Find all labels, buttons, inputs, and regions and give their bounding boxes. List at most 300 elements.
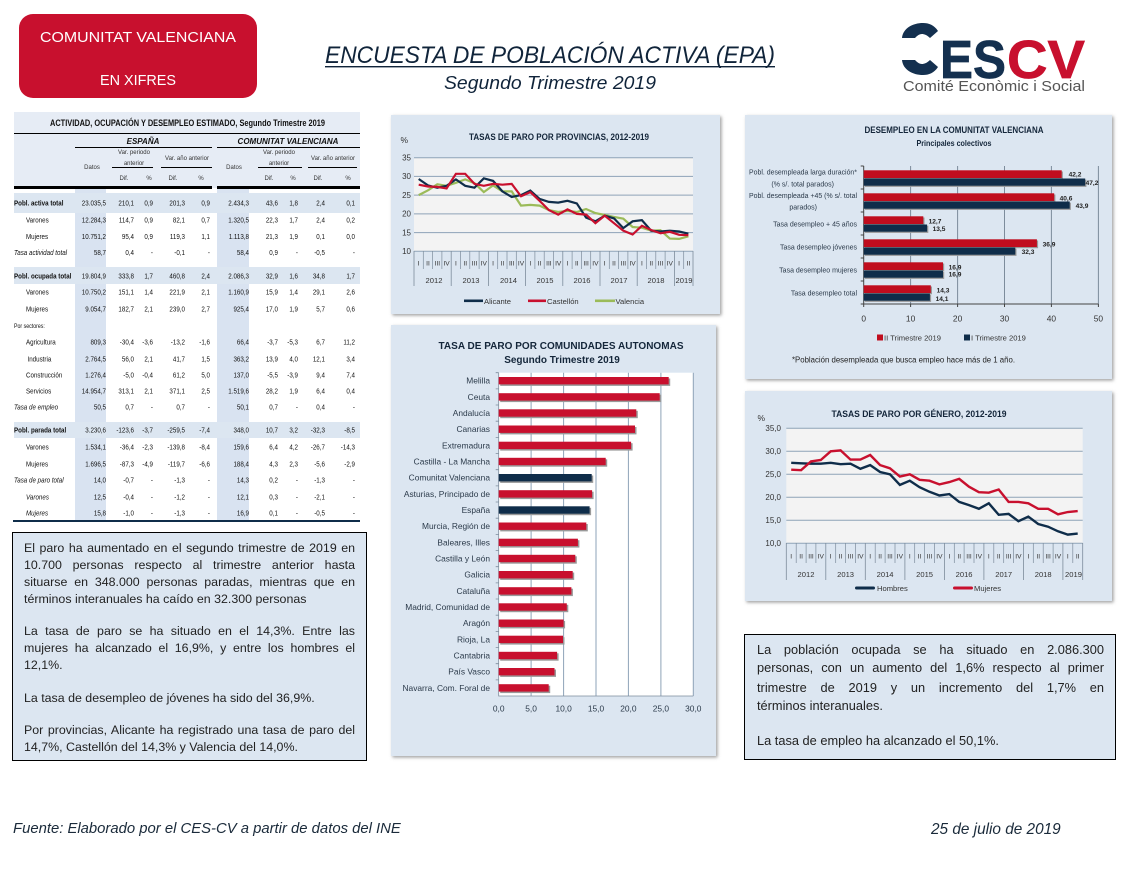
table rows: -139,8 (167, 444, 185, 452)
line chart: provincias: 20 (402, 210, 412, 219)
bar chart: comunidades: 25,0 (653, 704, 669, 714)
line chart: género: IV (1055, 553, 1062, 560)
bar chart: comunidades: Canarias (456, 424, 490, 434)
bar chart: colectivos: 30 (1000, 314, 1009, 324)
table rows: 809,3 (90, 339, 106, 347)
table rows: Pobl. parada total (14, 427, 66, 435)
panel: tasas de paro por género (745, 391, 1112, 601)
line chart: género: 20,0 (765, 493, 782, 502)
table: actividad, ocupación y desempleo (13, 112, 360, 522)
logo: CES CV: Comité Econòmic i Social (903, 79, 1085, 95)
table rows: 0,4 (125, 250, 134, 257)
table rows: Varones (26, 289, 49, 297)
line chart: provincias: 2016 (574, 276, 590, 285)
table rows: -0,4 (123, 494, 134, 502)
line chart: provincias: III (435, 260, 440, 267)
table rows: 41,7 (173, 356, 185, 364)
line chart: género: III (808, 553, 814, 560)
table rows: 1,4 (289, 289, 298, 297)
table rows: 29,1 (313, 289, 325, 297)
table header: anterior (269, 161, 289, 167)
table rows: - (151, 404, 153, 412)
line chart: género: I (909, 553, 911, 560)
line chart: provincias: 30 (402, 172, 412, 181)
table rows: 9.054,7 (85, 306, 106, 314)
text block: población ocupada: La tasa de empleo ha alcanzado el 50,1%. (757, 733, 999, 748)
legend: provincias (464, 297, 645, 306)
line chart: provincias: II (649, 260, 653, 267)
table rows: - (208, 404, 210, 412)
panel: desempleo en la Comunitat Valenciana (745, 115, 1112, 379)
table rows: Construcción (26, 372, 62, 380)
line chart: provincias: IV (629, 260, 636, 267)
table rows: 0,1 (316, 234, 325, 241)
bar chart: comunidades: Andalucía (453, 408, 490, 418)
table rows: 371,1 (169, 388, 185, 396)
table rows: 0,6 (346, 306, 355, 314)
line chart: género: I (869, 553, 871, 560)
bar chart: colectivos: 10 (906, 314, 916, 324)
line chart: género: 35,0 (765, 424, 782, 433)
table rows: 56,0 (122, 356, 134, 364)
line chart: género (757, 413, 1083, 580)
table rows: 159,6 (233, 444, 249, 452)
table rows: 0,0 (346, 234, 355, 241)
table rows: 17,0 (266, 306, 278, 314)
bar chart: colectivos: Tasa desempleo total (791, 291, 857, 298)
line chart: provincias: III (658, 260, 663, 267)
table rows: -0,5 (314, 250, 325, 257)
table rows: -1,3 (314, 477, 325, 485)
table rows: - (353, 404, 355, 412)
line chart: provincias: 35 (402, 154, 412, 162)
table rows: 1,7 (289, 217, 298, 225)
table rows: Pobl. ocupada total (14, 273, 71, 281)
legend: trimestres: I Trimestre 2019 (971, 334, 1026, 342)
table title: ACTIVIDAD, OCUPACIÓN Y DESEMPLEO ESTIMADO, Segundo Trimestre 2019 (50, 117, 325, 128)
table rows: -36,4 (120, 444, 134, 452)
table rows: 114,7 (119, 217, 134, 225)
line chart: provincias: II (463, 260, 467, 267)
bar chart: colectivos: 32,3 (1022, 249, 1035, 256)
table rows: 1,7 (144, 273, 153, 281)
table rows: 0,9 (201, 200, 210, 208)
table header: Var. año anterior (165, 156, 209, 162)
table rows: 2,5 (201, 388, 210, 396)
table rows: -26,7 (311, 444, 325, 452)
table rows: 6,4 (316, 388, 325, 396)
table rows: 12.284,3 (82, 217, 106, 225)
title (325, 42, 775, 93)
line chart: género: 2012 (798, 570, 814, 579)
legend: provincias: Alicante (484, 297, 511, 306)
chart title: Segundo Trimestre 2019 (504, 355, 620, 366)
line chart: género: 2014 (877, 570, 894, 579)
bar chart: colectivos: Tasa desempleo jóvenes (780, 245, 857, 252)
bar chart: colectivos: 16,9 (949, 264, 962, 271)
logo: CES CV (902, 23, 1085, 95)
table rows: 3,4 (346, 356, 355, 364)
line chart: provincias: IV (555, 260, 562, 267)
line chart: provincias: 2017 (611, 276, 627, 285)
table rows: 2,1 (144, 306, 153, 314)
line chart: provincias: 2015 (537, 276, 553, 285)
series: Mujeres (791, 450, 1078, 514)
text block: análisis del paro: Por provincias, Alicante ha registrado una tasa de paro del (24, 723, 355, 737)
table rows: Por sectores: (14, 324, 45, 330)
bar chart: comunidades: 30,0 (685, 704, 702, 714)
table rows: -0,1 (174, 250, 185, 257)
table rows: 2,7 (201, 306, 210, 314)
line chart: género: % (757, 413, 765, 423)
table rows: 0,4 (346, 388, 355, 396)
table rows: 188,4 (233, 461, 249, 469)
table rows: 14.954,7 (82, 388, 106, 396)
table rows: -3,7 (142, 427, 153, 435)
line chart: provincias: I (492, 260, 494, 267)
table rows: 12,1 (237, 494, 249, 502)
series: Valencia (419, 179, 688, 239)
line chart: provincias: I (641, 260, 643, 267)
line chart: género: 2017 (995, 570, 1012, 579)
table rows: 2.086,3 (228, 273, 249, 281)
table rows: 0,1 (346, 200, 355, 208)
table rows: 1,8 (289, 200, 298, 208)
table rows: 15,8 (94, 510, 106, 518)
table rows: 0,4 (316, 404, 325, 412)
bar chart: comunidades: 5,0 (525, 704, 537, 714)
table rows: 13,9 (266, 356, 278, 364)
table rows: -4,9 (142, 461, 153, 469)
table rows: 5,7 (316, 306, 325, 314)
table rows: 21,3 (266, 234, 278, 241)
table rows: -1,3 (174, 510, 185, 518)
table rows: - (353, 494, 355, 502)
table rows: -259,5 (167, 427, 185, 435)
table rows: - (353, 250, 355, 257)
table rows: 1,9 (289, 388, 298, 396)
table rows: - (208, 494, 210, 502)
line chart: provincias (400, 135, 693, 286)
table rows: 119,3 (170, 234, 185, 241)
table rows: 0,1 (269, 510, 278, 518)
table rows: 34,8 (313, 273, 325, 281)
bar chart: colectivos: 20 (953, 314, 963, 324)
table rows: 58,4 (237, 250, 249, 257)
bar chart: colectivos: 50 (1094, 314, 1103, 324)
line chart: género: IV (818, 553, 825, 560)
footnote: *Población desempleada que busca empleo hace más de 1 año. (792, 356, 1015, 364)
line chart: género: III (848, 553, 853, 560)
table rows: -7,4 (199, 427, 210, 435)
legend: provincias: Castellón (547, 297, 579, 306)
table rows: -14,3 (341, 444, 355, 452)
bar chart: comunidades: 10,0 (555, 704, 572, 714)
table rows: -5,0 (123, 372, 134, 380)
table rows: -5,6 (314, 461, 325, 469)
bar chart: comunidades: Castilla - La Mancha (414, 456, 490, 466)
line chart: provincias: 25 (402, 191, 412, 200)
table rows: -0,7 (123, 477, 134, 485)
text block: población ocupada: personas, con un aumento del 1,6% respecto al primer (757, 660, 1104, 675)
table rows: 4,0 (289, 356, 298, 364)
bar chart: comunidades: Castilla y León (435, 554, 490, 564)
table rows: - (151, 250, 153, 257)
line chart: género: III (1006, 553, 1012, 560)
table header: Dif. (264, 176, 274, 182)
line chart: género: II (918, 553, 922, 560)
line chart: género: I (1067, 553, 1069, 560)
legend: provincias: Valencia (616, 297, 645, 306)
table rows: Tasa actividad total (14, 250, 67, 257)
table rows: 1,9 (289, 306, 298, 314)
table rows: 460,8 (169, 273, 185, 281)
table rows: -1,2 (174, 494, 185, 502)
table rows: -5,5 (267, 372, 278, 380)
line chart: género: III (927, 553, 932, 560)
table header: Var. año anterior (311, 156, 355, 162)
bar chart: colectivos: 47,2 (1086, 180, 1099, 187)
table header: ESPAÑA (127, 137, 160, 146)
table rows: 12,5 (94, 494, 106, 502)
line chart: provincias: III (546, 260, 552, 267)
table rows: 1,5 (201, 356, 210, 364)
table rows: 137,0 (233, 372, 249, 380)
table rows: 32,9 (266, 273, 278, 281)
table rows: 0,9 (144, 200, 153, 208)
table rows: 1.276,4 (85, 372, 106, 380)
table rows: Agricultura (26, 339, 56, 347)
table rows: -0,4 (142, 372, 153, 380)
table rows: 363,2 (233, 356, 249, 364)
line chart: provincias: IV (667, 260, 674, 267)
bar chart: comunidades: Extremadura (442, 440, 490, 450)
bar chart: colectivos: 14,3 (937, 287, 950, 294)
line chart: provincias: III (509, 260, 515, 267)
line chart: género: I (1027, 553, 1029, 560)
table rows: - (296, 477, 298, 485)
table rows: 23.035,5 (82, 200, 106, 208)
line chart: provincias: II (426, 260, 430, 267)
bar chart: comunidades: Ceuta (468, 392, 490, 402)
bar chart: comunidades (402, 373, 702, 714)
line chart: género: III (1045, 553, 1051, 560)
text block: análisis del paro: mujeres ha alcanzado el 16,9%, y entre los hombres el (24, 641, 355, 655)
table rows: 0,3 (269, 494, 278, 502)
bar chart: colectivos: parados) (789, 204, 817, 212)
table rows: 15,9 (266, 289, 278, 297)
text block: análisis del paro: 12,1%. (24, 658, 63, 672)
table rows: 61,2 (173, 372, 185, 380)
badge: Comunitat Valenciana en xifres: EN XIFRES (100, 72, 176, 89)
table rows: Pobl. activa total (14, 200, 64, 208)
line chart: provincias: I (678, 260, 680, 267)
table rows: -2,1 (314, 494, 325, 502)
table header: Var. periodo (263, 150, 296, 156)
chart title (438, 341, 684, 366)
table rows: 9,4 (316, 372, 325, 380)
text block: análisis del paro: La tasa de paro se ha situado en el 14,3%. Entre las (24, 624, 355, 638)
table rows: 210,1 (118, 200, 134, 208)
table rows: 50,1 (237, 404, 249, 412)
legend: trimestres (877, 334, 1026, 342)
line chart: género: II (839, 553, 843, 560)
table rows: - (353, 510, 355, 518)
table rows: 3,2 (289, 427, 298, 435)
table rows: 1.519,6 (228, 388, 249, 396)
bar chart: comunidades: Baleares, Illes (437, 537, 490, 547)
line chart: provincias: II (612, 260, 616, 267)
chart title: Principales colectivos (916, 138, 992, 148)
date: 25 de julio de 2019 (931, 821, 1061, 838)
bar chart: colectivos: 12,7 (929, 219, 942, 226)
text block: análisis del paro: 10.700 personas respecto al trimestre anterior hasta (24, 558, 355, 572)
bar chart: colectivos (749, 166, 1103, 324)
legend: género: Hombres (877, 584, 908, 593)
table rows: 3.230,6 (85, 427, 106, 435)
table rows: 14,3 (237, 477, 249, 485)
table rows: Industria (27, 356, 51, 364)
title: ENCUESTA DE POBLACIÓN ACTIVA (EPA) (325, 42, 775, 69)
line chart: provincias: III (583, 260, 589, 267)
table rows: 182,7 (118, 306, 134, 314)
table rows: - (353, 477, 355, 485)
table rows: Tasa de paro total (14, 477, 64, 485)
text block: análisis del paro: términos interanuales ha caído en 32.300 personas (24, 592, 306, 606)
table rows: -3,9 (287, 372, 298, 380)
bar chart: colectivos: 36,9 (1043, 241, 1056, 248)
table rows: 2,1 (144, 356, 153, 364)
bar chart: colectivos: 16,9 (949, 272, 962, 279)
table rows: 28,2 (266, 388, 278, 396)
table rows: 1.160,9 (228, 289, 249, 297)
bar chart: colectivos: Tasa desempleo + 45 años (773, 222, 857, 229)
table rows: 1,9 (289, 234, 298, 241)
table rows: 2.764,5 (85, 356, 106, 364)
bar chart: comunidades: País Vasco (448, 667, 490, 677)
panel: tasa de paro por comunidades autónomas (391, 325, 716, 756)
bar chart: comunidades: Navarra, Com. Foral de (402, 683, 490, 693)
line chart: provincias: I (567, 260, 569, 267)
text block: análisis del paro (12, 532, 367, 761)
table rows: 10,7 (266, 427, 278, 435)
table rows: -3,7 (267, 339, 278, 347)
bar chart: comunidades: Asturias, Principado de (404, 489, 490, 499)
line chart: provincias: % (400, 135, 408, 145)
table header: Var. periodo (118, 150, 151, 156)
line chart: provincias: II (538, 260, 542, 267)
table header: Dif. (168, 176, 178, 182)
table rows: -0,5 (314, 510, 325, 518)
bar chart: comunidades: 0,0 (493, 704, 505, 714)
table rows: -3,6 (142, 339, 153, 347)
text block: población ocupada: La población ocupada se ha situado en 2.086.300 (757, 642, 1104, 657)
bar chart: colectivos: 14,1 (936, 296, 949, 303)
table rows: -2,3 (142, 444, 153, 452)
series: Hombres (791, 463, 1078, 535)
line chart: provincias: 15 (402, 228, 412, 237)
table header: % (345, 176, 351, 182)
table rows: -13,2 (171, 339, 185, 347)
line chart: provincias: III (621, 260, 626, 267)
table rows: 313,1 (118, 388, 134, 396)
table rows: 6,4 (269, 444, 278, 452)
line chart: género: 30,0 (765, 447, 782, 456)
table header: Datos (84, 165, 100, 171)
table rows: - (151, 494, 153, 502)
bar chart: colectivos: 43,9 (1076, 203, 1089, 210)
table rows: 11,2 (343, 339, 355, 347)
table rows: 0,7 (125, 404, 134, 412)
table rows: 151,1 (118, 289, 134, 297)
table rows: 14,0 (94, 477, 106, 485)
line chart: provincias: I (418, 260, 420, 267)
table rows: - (296, 494, 298, 502)
bar chart: comunidades: Galicia (464, 570, 490, 580)
bar chart: comunidades: Madrid, Comunidad de (405, 602, 490, 612)
table rows: 1.320,5 (228, 217, 249, 225)
text block: población ocupada: trimestre de 2019 y un incremento del 1,7% en (757, 680, 1104, 695)
chart title (864, 125, 1044, 148)
table rows: - (151, 510, 153, 518)
table rows: Varones (26, 217, 49, 225)
line chart: provincias: 10 (402, 247, 412, 256)
table rows: Mujeres (26, 306, 49, 314)
line chart: provincias: II (687, 260, 690, 267)
bar chart: colectivos: (% s/. total parados) (771, 181, 834, 188)
table rows: 2,1 (144, 388, 153, 396)
table rows: 0,7 (269, 404, 278, 412)
table rows: 201,3 (169, 200, 185, 208)
table header (84, 137, 355, 182)
line chart: género: 25,0 (765, 470, 782, 479)
bar chart: comunidades: Murcia, Región de (422, 521, 490, 531)
source note: Fuente: Elaborado por el CES-CV a partir de datos del INE (13, 821, 401, 837)
logo: CES CV: ES (940, 30, 1006, 90)
table rows: 0,9 (269, 250, 278, 257)
line chart: provincias: IV (481, 260, 488, 267)
line chart: género: I (988, 553, 990, 560)
table rows: - (296, 510, 298, 518)
table rows: 2,4 (316, 200, 325, 208)
bar chart: colectivos: 40 (1047, 314, 1056, 324)
text block: análisis del paro: situarse en 348.000 personas paradas, mientras que en (24, 575, 355, 589)
table rows: - (296, 250, 298, 257)
line chart: provincias: 2014 (500, 276, 517, 285)
legend: trimestres: II Trimestre 2019 (884, 334, 941, 342)
title: Segundo Trimestre 2019 (444, 72, 656, 93)
table rows: -2,9 (344, 461, 355, 469)
line chart: provincias: II (575, 260, 579, 267)
line chart: provincias: II (501, 260, 504, 267)
table rows: 19.804,9 (82, 273, 106, 281)
line chart: provincias: IV (592, 260, 599, 267)
line chart: género: II (1076, 553, 1080, 560)
line chart: género: III (887, 553, 893, 560)
line chart: provincias: IV (443, 260, 450, 267)
line chart: género: I (948, 553, 950, 560)
table rows: -87,3 (120, 461, 134, 469)
bar chart: colectivos: 40,6 (1060, 195, 1073, 202)
table rows: 239,0 (169, 306, 185, 314)
line chart: género: II (957, 553, 961, 560)
chart title: DESEMPLEO EN LA COMUNITAT VALENCIANA (864, 125, 1044, 135)
chart title: TASAS DE PARO POR PROVINCIAS, 2012-2019 (469, 132, 649, 142)
table rows: 2,4 (316, 217, 325, 225)
bar chart: comunidades: Aragón (463, 618, 490, 628)
table rows: 333,8 (118, 273, 134, 281)
bar chart: colectivos: 42,2 (1069, 171, 1082, 178)
